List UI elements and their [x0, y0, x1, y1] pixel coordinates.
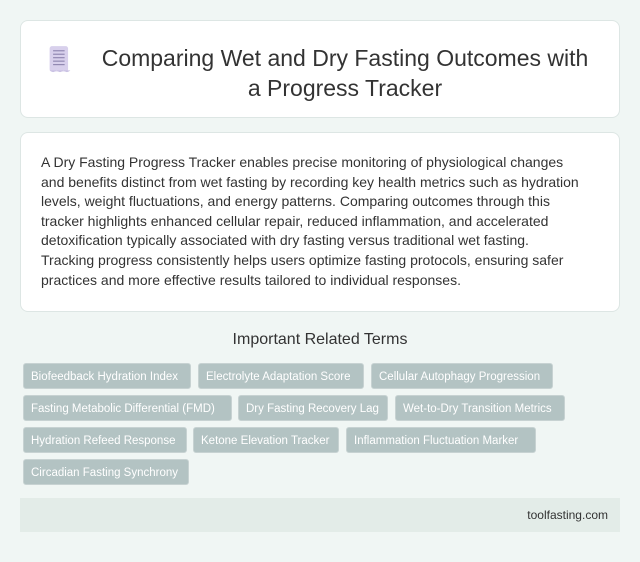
description card: and benefits distinct from wet fasting by recording key health metrics such as hydration [41, 174, 579, 190]
text: Circadian Fasting Synchrony [31, 467, 178, 479]
text: Ketone Elevation Tracker [201, 435, 330, 447]
text: Fasting Metabolic Differential (FMD) [31, 403, 215, 415]
description card: detoxification typically associated with dry fasting versus traditional wet fasting. [41, 232, 529, 248]
related terms heading: Important Related Terms [233, 331, 407, 348]
text: Biofeedback Hydration Index [31, 371, 178, 383]
text: Electrolyte Adaptation Score [206, 371, 350, 383]
text: Wet-to-Dry Transition Metrics [403, 403, 552, 415]
icon: receipt [50, 46, 70, 72]
text: Dry Fasting Recovery Lag [246, 403, 379, 415]
title [102, 45, 588, 101]
footer [20, 498, 620, 532]
tags [23, 363, 565, 485]
header card [20, 20, 620, 118]
description card [20, 132, 620, 312]
text: Inflammation Fluctuation Marker [354, 435, 518, 447]
title: a Progress Tracker [248, 75, 442, 101]
description card: Tracking progress consistently helps users optimize fasting protocols, ensuring safer [41, 252, 563, 268]
text: Cellular Autophagy Progression [379, 371, 540, 383]
description card: tracker highlights enhanced cellular repair, reduced inflammation, and accelerated [41, 213, 548, 229]
description card: practices and more effective results tailored to individual responses. [41, 272, 461, 288]
description card: levels, weight fluctuations, and energy patterns. Comparing outcomes through this [41, 193, 550, 209]
text: Hydration Refeed Response [31, 435, 175, 447]
description card: A Dry Fasting Progress Tracker enables precise monitoring of physiological changes [41, 154, 563, 170]
footer: toolfasting.com [527, 508, 608, 522]
title: Comparing Wet and Dry Fasting Outcomes with [102, 45, 588, 71]
